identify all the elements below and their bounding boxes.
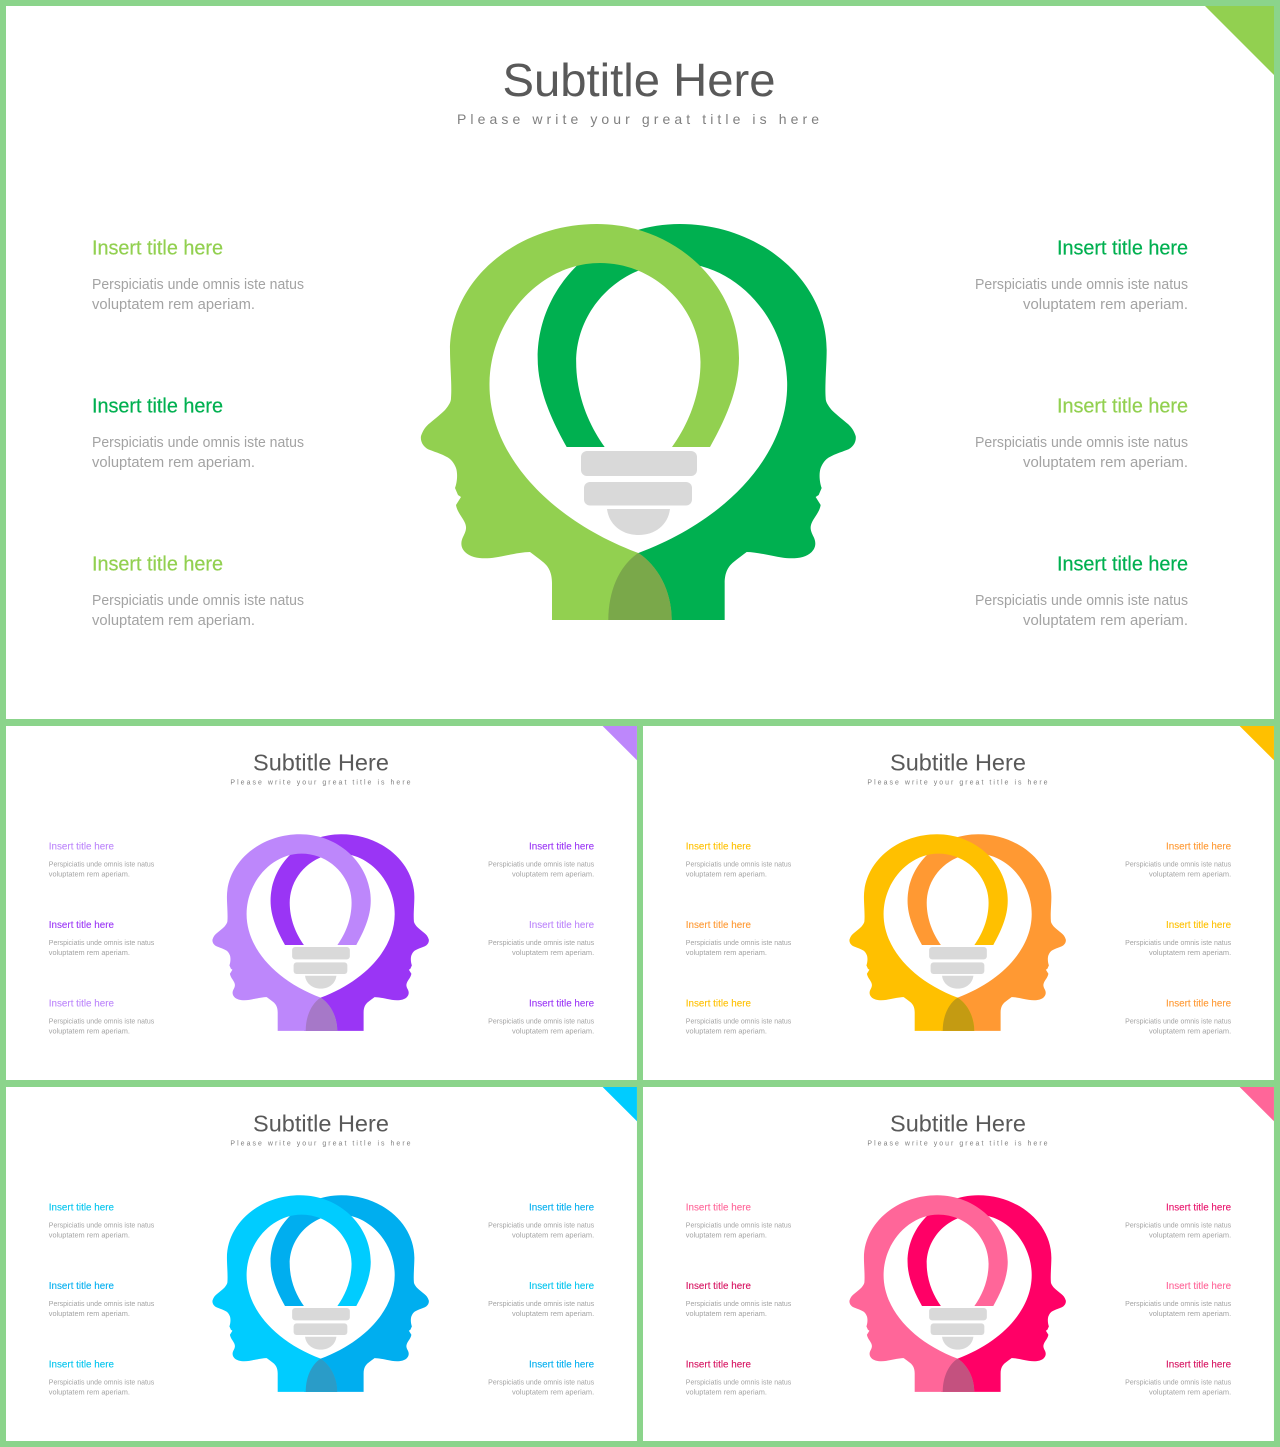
- corner triangle: [1240, 1087, 1274, 1121]
- subtitle: Please write your great title is here: [867, 780, 1048, 787]
- text block: left 2: voluptatem rem aperiam.: [92, 455, 255, 471]
- text block: right 2: Insert title here: [1166, 1281, 1232, 1292]
- heads and bulb icon: [849, 1195, 1066, 1392]
- text block: left 2: [49, 1281, 155, 1318]
- text block: left 2: Perspiciatis unde omnis iste natus: [49, 938, 155, 947]
- panel: blue slide: [6, 1087, 637, 1441]
- text block: left 1: Perspiciatis unde omnis iste natus: [49, 860, 155, 869]
- text block: left 3: Perspiciatis unde omnis iste natus: [92, 593, 304, 609]
- text block: left 1: Insert title here: [49, 1202, 114, 1213]
- heads and bulb icon: [421, 224, 856, 620]
- text block: left 1: Perspiciatis unde omnis iste natus: [686, 1221, 792, 1230]
- text block: left 1: [92, 238, 304, 313]
- text block: right 1: Insert title here: [529, 841, 595, 852]
- text block: right 1: [1125, 841, 1232, 878]
- text block: right 3: [488, 998, 595, 1035]
- text block: right 2: voluptatem rem aperiam.: [1023, 455, 1188, 471]
- text block: right 1: [1125, 1202, 1232, 1239]
- text block: right 1: [488, 841, 595, 878]
- text block: right 3: Insert title here: [1057, 554, 1188, 576]
- text block: right 3: Perspiciatis unde omnis iste natus: [1125, 1377, 1232, 1386]
- text block: right 1: Perspiciatis unde omnis iste natus: [1125, 1221, 1232, 1230]
- text block: right 3: Perspiciatis unde omnis iste natus: [488, 1377, 595, 1386]
- corner triangle: [1240, 726, 1274, 760]
- corner triangle: [1205, 6, 1274, 75]
- text block: left 2: [92, 396, 304, 471]
- panel: pink slide: [643, 1087, 1274, 1441]
- text block: right 1: voluptatem rem aperiam.: [1149, 1230, 1231, 1239]
- text block: right 1: Insert title here: [1057, 238, 1188, 260]
- text block: right 1: voluptatem rem aperiam.: [1149, 869, 1231, 878]
- text block: right 2: voluptatem rem aperiam.: [512, 948, 594, 957]
- text block: right 1: Perspiciatis unde omnis iste natus: [1125, 860, 1232, 869]
- text block: right 3: Perspiciatis unde omnis iste natus: [488, 1016, 595, 1025]
- text block: right 2: voluptatem rem aperiam.: [1149, 948, 1231, 957]
- text block: left 2: voluptatem rem aperiam.: [49, 948, 130, 957]
- text block: left 1: voluptatem rem aperiam.: [686, 1230, 767, 1239]
- text block: right 2: Insert title here: [1166, 920, 1232, 931]
- title: Subtitle Here: [253, 750, 389, 776]
- text block: left 2: Perspiciatis unde omnis iste natus: [686, 938, 792, 947]
- text block: left 1: voluptatem rem aperiam.: [92, 297, 255, 313]
- text block: right 3: [1125, 1359, 1232, 1396]
- text block: left 3: Insert title here: [49, 998, 114, 1009]
- text block: right 1: [488, 1202, 595, 1239]
- text block: left 3: Insert title here: [92, 554, 223, 576]
- subtitle: Please write your great title is here: [457, 111, 819, 127]
- text block: right 2: Insert title here: [1057, 396, 1188, 418]
- text block: left 2: voluptatem rem aperiam.: [49, 1309, 130, 1318]
- text block: left 2: Insert title here: [686, 920, 751, 931]
- text block: right 1: Perspiciatis unde omnis iste natus: [975, 277, 1188, 293]
- corner triangle: [603, 1087, 637, 1121]
- heads and bulb icon: [212, 834, 429, 1031]
- text block: right 1: Perspiciatis unde omnis iste natus: [488, 860, 595, 869]
- text block: right 3: voluptatem rem aperiam.: [1149, 1387, 1231, 1396]
- text block: left 2: Perspiciatis unde omnis iste natus: [49, 1299, 155, 1308]
- text block: right 2: voluptatem rem aperiam.: [512, 1309, 594, 1318]
- text block: left 2: [686, 1281, 792, 1318]
- text block: right 2: Perspiciatis unde omnis iste natus: [1125, 1299, 1232, 1308]
- subtitle: Please write your great title is here: [867, 1141, 1048, 1148]
- text block: right 2: [488, 920, 595, 957]
- text block: left 1: Insert title here: [49, 841, 114, 852]
- heads and bulb icon: [212, 1195, 429, 1392]
- text block: left 2: Perspiciatis unde omnis iste natus: [686, 1299, 792, 1308]
- text block: left 2: Insert title here: [686, 1281, 751, 1292]
- text block: left 3: Insert title here: [686, 998, 751, 1009]
- text block: right 3: Perspiciatis unde omnis iste natus: [1125, 1016, 1232, 1025]
- text block: left 2: voluptatem rem aperiam.: [686, 1309, 767, 1318]
- text block: right 1: voluptatem rem aperiam.: [1023, 297, 1188, 313]
- text block: right 2: Perspiciatis unde omnis iste natus: [975, 435, 1188, 451]
- text block: right 2: Insert title here: [529, 920, 595, 931]
- text block: left 3: Insert title here: [49, 1359, 114, 1370]
- title: Subtitle Here: [502, 54, 776, 106]
- text block: right 1: [975, 238, 1188, 313]
- text block: right 1: voluptatem rem aperiam.: [512, 869, 594, 878]
- text block: left 1: [686, 1202, 792, 1239]
- text block: left 3: [686, 998, 792, 1035]
- text block: left 3: [49, 1359, 155, 1396]
- text block: right 3: Perspiciatis unde omnis iste natus: [975, 593, 1188, 609]
- text block: right 3: Insert title here: [1166, 998, 1232, 1009]
- text block: left 3: voluptatem rem aperiam.: [686, 1026, 767, 1035]
- text block: left 3: voluptatem rem aperiam.: [49, 1026, 130, 1035]
- text block: right 3: [488, 1359, 595, 1396]
- text block: left 3: [686, 1359, 792, 1396]
- text block: right 3: voluptatem rem aperiam.: [512, 1026, 594, 1035]
- text block: left 2: [49, 920, 155, 957]
- text block: left 1: Insert title here: [686, 841, 751, 852]
- text block: left 3: voluptatem rem aperiam.: [49, 1387, 130, 1396]
- text block: right 2: [488, 1281, 595, 1318]
- text block: left 3: Perspiciatis unde omnis iste natus: [686, 1016, 792, 1025]
- corner triangle: [603, 726, 637, 760]
- text block: left 1: [49, 841, 155, 878]
- text block: left 1: [49, 1202, 155, 1239]
- text block: right 3: [975, 554, 1188, 629]
- subtitle: Please write your great title is here: [230, 1141, 411, 1148]
- text block: right 3: [1125, 998, 1232, 1035]
- text block: left 1: Insert title here: [686, 1202, 751, 1213]
- text block: right 2: Perspiciatis unde omnis iste natus: [488, 938, 595, 947]
- text block: left 3: voluptatem rem aperiam.: [92, 613, 255, 629]
- heads and bulb icon: [849, 834, 1066, 1031]
- text block: right 2: Perspiciatis unde omnis iste natus: [1125, 938, 1232, 947]
- text block: left 3: Perspiciatis unde omnis iste natus: [49, 1377, 155, 1386]
- text block: right 3: voluptatem rem aperiam.: [1149, 1026, 1231, 1035]
- text block: left 2: Perspiciatis unde omnis iste natus: [92, 435, 304, 451]
- text block: right 2: [1125, 920, 1232, 957]
- text block: right 3: voluptatem rem aperiam.: [1023, 613, 1188, 629]
- text block: right 1: Insert title here: [529, 1202, 595, 1213]
- text block: right 2: [1125, 1281, 1232, 1318]
- panel: green slide: [6, 6, 1274, 719]
- text block: right 3: voluptatem rem aperiam.: [512, 1387, 594, 1396]
- panel: purple slide: [6, 726, 637, 1080]
- text block: left 3: Insert title here: [686, 1359, 751, 1370]
- text block: right 2: [975, 396, 1188, 471]
- text block: right 3: Insert title here: [529, 998, 595, 1009]
- text block: left 3: Perspiciatis unde omnis iste natus: [49, 1016, 155, 1025]
- text block: right 1: voluptatem rem aperiam.: [512, 1230, 594, 1239]
- text block: left 1: voluptatem rem aperiam.: [49, 1230, 130, 1239]
- text block: left 2: [686, 920, 792, 957]
- title: Subtitle Here: [253, 1111, 389, 1137]
- text block: left 1: voluptatem rem aperiam.: [49, 869, 130, 878]
- text block: right 2: Insert title here: [529, 1281, 595, 1292]
- text block: right 3: Insert title here: [529, 1359, 595, 1370]
- text block: right 3: Insert title here: [1166, 1359, 1232, 1370]
- text block: left 3: [49, 998, 155, 1035]
- text block: left 3: Perspiciatis unde omnis iste natus: [686, 1377, 792, 1386]
- text block: left 1: Insert title here: [92, 238, 223, 260]
- title: Subtitle Here: [890, 750, 1026, 776]
- text block: left 2: voluptatem rem aperiam.: [686, 948, 767, 957]
- text block: right 2: Perspiciatis unde omnis iste natus: [488, 1299, 595, 1308]
- text block: left 2: Insert title here: [49, 1281, 114, 1292]
- text block: left 1: Perspiciatis unde omnis iste natus: [92, 277, 304, 293]
- subtitle: Please write your great title is here: [230, 780, 411, 787]
- text block: right 1: Perspiciatis unde omnis iste natus: [488, 1221, 595, 1230]
- text block: left 1: [686, 841, 792, 878]
- text block: left 1: Perspiciatis unde omnis iste natus: [49, 1221, 155, 1230]
- panel: orange slide: [643, 726, 1274, 1080]
- text block: left 2: Insert title here: [92, 396, 223, 418]
- text block: left 3: voluptatem rem aperiam.: [686, 1387, 767, 1396]
- text block: right 1: Insert title here: [1166, 841, 1232, 852]
- text block: left 1: Perspiciatis unde omnis iste natus: [686, 860, 792, 869]
- text block: left 3: [92, 554, 304, 629]
- text block: right 1: Insert title here: [1166, 1202, 1232, 1213]
- title: Subtitle Here: [890, 1111, 1026, 1137]
- text block: left 1: voluptatem rem aperiam.: [686, 869, 767, 878]
- text block: left 2: Insert title here: [49, 920, 114, 931]
- text block: right 2: voluptatem rem aperiam.: [1149, 1309, 1231, 1318]
